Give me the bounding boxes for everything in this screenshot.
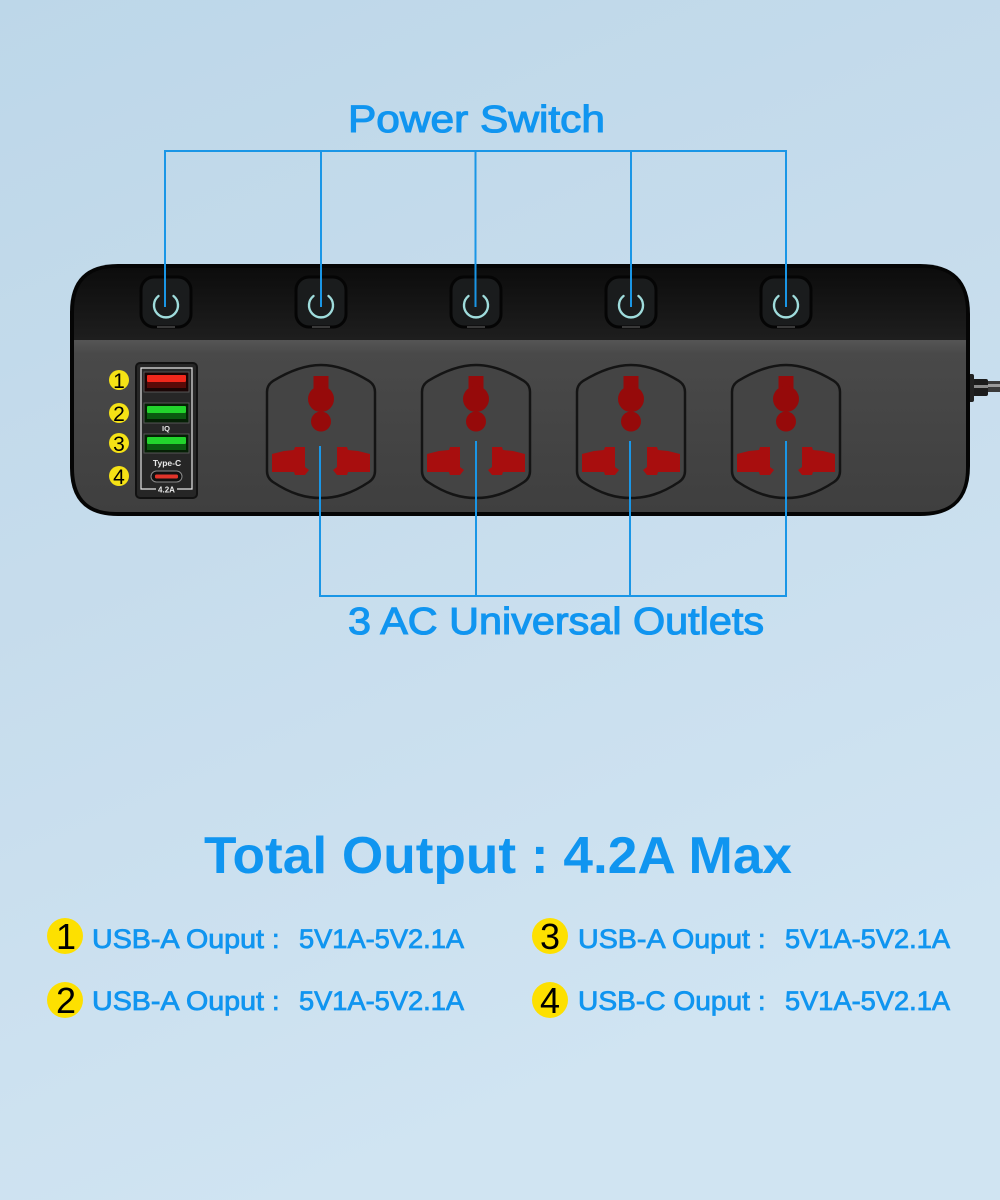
power switch buttons: [141, 277, 811, 327]
spec item 3: 5V1A-5V2.1A: [785, 924, 950, 954]
spec item 2: USB-A Ouput: [92, 986, 265, 1016]
spec item 2: :: [272, 986, 280, 1016]
Type-C label: Type-C: [153, 458, 181, 468]
spec item 4: 4: [540, 980, 560, 1021]
switch 4: [606, 277, 656, 327]
spec item 2: [47, 980, 464, 1021]
4.2A label: 4.2A: [158, 486, 175, 494]
spec item 2: 5V1A-5V2.1A: [299, 986, 464, 1016]
port 1 red USB-A: [144, 372, 189, 392]
switch 5: [761, 277, 811, 327]
badge 1: 1: [113, 370, 125, 393]
spec item 1: 5V1A-5V2.1A: [299, 924, 464, 954]
outlet 1: [267, 365, 375, 498]
heading: Power Switch: Power Switch: [348, 99, 605, 141]
spec item 4: [532, 980, 950, 1021]
spec item 1: 1: [56, 916, 76, 957]
callout lines: outlets: [320, 441, 786, 596]
power strip body: [70, 264, 970, 516]
heading: Total Output: Total Output : 4.2A Max: [204, 827, 792, 885]
port number badges: [109, 370, 129, 489]
spec item 3: :: [758, 924, 766, 954]
spec item 4: :: [758, 986, 766, 1016]
spec item 1: :: [272, 924, 280, 954]
port 4 Type-C: [151, 471, 182, 482]
spec item 1: [47, 916, 464, 957]
badge 2: 2: [113, 403, 125, 426]
switch 2: [296, 277, 346, 327]
spec item 4: USB-C Ouput: [578, 986, 751, 1016]
port 2 green USB-A: [144, 403, 189, 423]
power cord: [968, 374, 1000, 402]
switch 1: [141, 277, 191, 327]
spec item 3: [532, 916, 950, 957]
outlet 2: [422, 365, 530, 498]
callout lines: power switches: [165, 151, 786, 307]
spec item 3: 3: [540, 916, 560, 957]
spec item 4: 5V1A-5V2.1A: [785, 986, 950, 1016]
spec item 2: 2: [56, 980, 76, 1021]
outlet 4: [732, 365, 840, 498]
badge 4: 4: [113, 466, 125, 489]
IQ label: IQ: [162, 424, 170, 433]
spec item 1: USB-A Ouput: [92, 924, 265, 954]
switch 3: [451, 277, 501, 327]
USB port panel: [136, 363, 197, 498]
spec item 3: USB-A Ouput: [578, 924, 751, 954]
port 3 green USB-A: [144, 434, 189, 453]
outlet 3: [577, 365, 685, 498]
badge 3: 3: [113, 433, 125, 456]
heading: 3 AC Universal Outlets: 3 AC Universal Outlets: [348, 601, 764, 643]
